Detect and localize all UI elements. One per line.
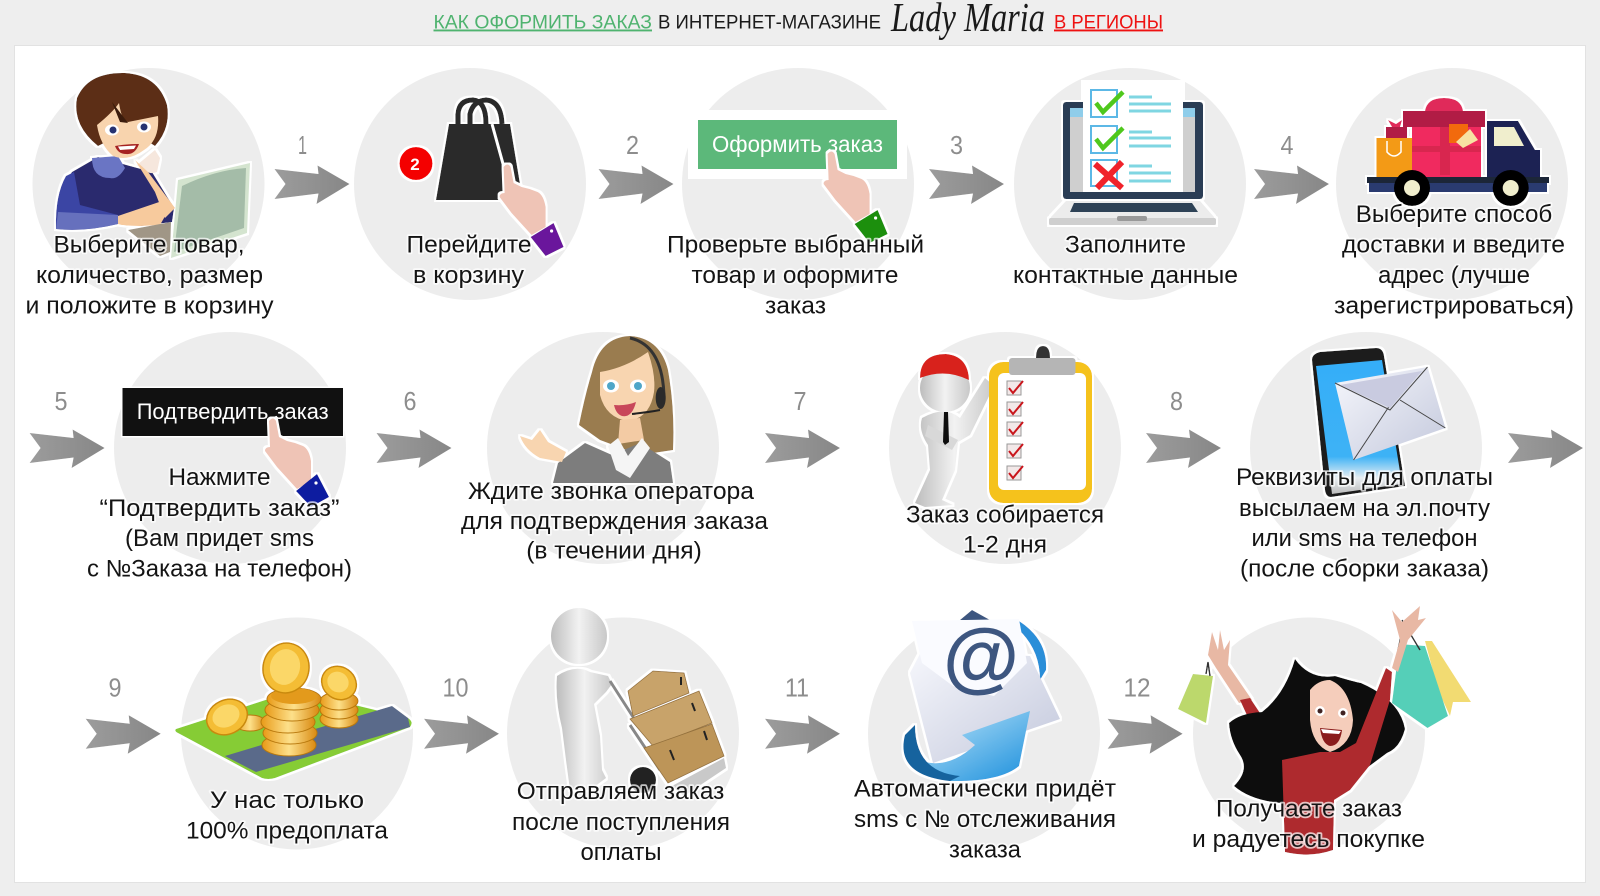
button: checkout: Оформить заказ	[712, 131, 883, 157]
number: 2	[626, 130, 639, 160]
number: 4	[1280, 130, 1294, 160]
text: Заказ собирается	[906, 502, 1104, 529]
icon: bank card with coins	[175, 639, 412, 779]
step: choose delivery	[1334, 68, 1574, 320]
text: или sms на телефон	[1252, 525, 1478, 552]
text: адрес (лучше	[1378, 262, 1530, 289]
text: Отправляем заказ	[517, 778, 724, 805]
text: товар и оформите	[692, 262, 898, 289]
step: choose product	[26, 68, 274, 320]
number: 5	[54, 386, 68, 416]
text: и радуетесь покупке	[1192, 826, 1425, 853]
number: 12	[1124, 673, 1150, 703]
circle	[1014, 68, 1246, 300]
arrow shape	[765, 715, 840, 754]
number: 9	[108, 673, 122, 703]
text: Заполните	[1065, 232, 1186, 259]
icon: shopping bag with badge: 2	[410, 155, 420, 174]
text: для подтверждения заказа	[461, 508, 769, 535]
arrow 12	[1108, 673, 1183, 754]
icon: happy woman with shopping bags	[1178, 606, 1471, 855]
arrow 10	[424, 673, 499, 754]
circle	[487, 332, 719, 564]
circle	[1336, 68, 1568, 300]
number: 1	[298, 130, 307, 160]
number: 8	[1170, 386, 1183, 416]
circle	[32, 68, 264, 300]
text: sms с № отслеживания	[854, 806, 1116, 833]
text: в корзину	[413, 262, 524, 289]
circle	[1193, 618, 1425, 850]
icon: woman at laptop	[56, 73, 250, 258]
step: check and checkout	[667, 68, 924, 320]
arrow shape	[86, 715, 161, 754]
text: Выберите товар,	[54, 232, 244, 259]
icon: delivery truck	[1367, 98, 1549, 206]
circle	[889, 332, 1121, 564]
arrow 9	[86, 673, 161, 754]
circle	[868, 618, 1100, 850]
text: доставки и введите	[1342, 232, 1565, 259]
arrow shape	[30, 430, 105, 468]
circle	[507, 618, 739, 850]
step: fill in contacts	[1013, 68, 1246, 300]
text: контактные данные	[1013, 262, 1238, 289]
number: 11	[785, 673, 809, 703]
arrow 7	[765, 386, 840, 468]
text: У нас только	[210, 787, 364, 814]
step: payment details	[1236, 332, 1493, 582]
arrow 1	[274, 130, 350, 204]
text: высылаем на эл.почту	[1239, 495, 1490, 522]
button: confirm	[121, 386, 344, 438]
text: “Подтвердить заказ”	[100, 495, 340, 522]
arrow 3	[929, 130, 1004, 204]
arrow shape	[376, 430, 452, 468]
icon: shopping bag with badge	[400, 100, 521, 200]
text	[26, 232, 274, 320]
text: зарегистрироваться)	[1334, 292, 1574, 320]
step: wait for operator call	[461, 332, 769, 564]
arrow shape	[1254, 166, 1329, 204]
number: 10	[442, 673, 468, 703]
arrow shape	[424, 715, 499, 754]
step: order assembly	[889, 332, 1121, 564]
circle	[1250, 332, 1482, 564]
text: Автоматически придёт	[854, 776, 1116, 803]
title	[434, 0, 1163, 40]
text	[87, 464, 352, 582]
text: оплаты	[580, 839, 662, 866]
circle	[181, 618, 413, 850]
arrow shape	[1146, 430, 1221, 468]
text: с №Заказа на телефон)	[87, 556, 352, 582]
text	[1192, 796, 1425, 853]
arrow 5	[30, 386, 105, 468]
text: Ждите звонка оператора	[468, 478, 755, 505]
arrow 4	[1254, 130, 1329, 204]
text: (после сборки заказа)	[1240, 556, 1489, 582]
text: (в течении дня)	[526, 538, 702, 564]
circle	[114, 332, 346, 564]
arrow 2	[598, 130, 674, 204]
text	[461, 478, 769, 564]
step: sms tracking	[854, 610, 1116, 864]
text	[1236, 464, 1493, 582]
button: confirm: Подтвердить заказ	[137, 399, 329, 424]
number: 7	[794, 386, 806, 416]
text: заказа	[949, 837, 1022, 864]
icon: email envelope with arrow: @	[943, 612, 1019, 700]
title link: to regions: В РЕГИОНЫ	[1054, 12, 1163, 34]
icon: figure with hand truck	[551, 608, 726, 796]
arrow: next row	[1508, 430, 1583, 468]
icon: laptop with checklist	[1049, 82, 1216, 225]
number: 6	[404, 386, 416, 416]
text: после поступления	[512, 809, 730, 836]
title text: online store: В ИНТЕРНЕТ-МАГАЗИНЕ	[658, 12, 881, 34]
step: receive order	[1178, 606, 1471, 855]
arrow 6	[376, 386, 452, 468]
step: shipping	[507, 608, 739, 866]
button: checkout	[688, 110, 907, 179]
text: Выберите способ	[1356, 201, 1552, 228]
text: количество, размер	[36, 262, 263, 289]
text: Нажмите	[168, 464, 270, 491]
circle	[682, 68, 914, 300]
text: заказ	[765, 292, 826, 320]
text: Реквизиты для оплаты	[1236, 464, 1493, 491]
text: Проверьте выбранный	[667, 232, 924, 259]
arrow shape	[765, 430, 840, 468]
text	[854, 776, 1116, 864]
icon: pointing hand, purple cuff	[500, 164, 564, 256]
title link: how to order: КАК ОФОРМИТЬ ЗАКАЗ	[434, 12, 652, 34]
icon: figure with clipboard	[915, 346, 1092, 507]
text: и положите в корзину	[26, 292, 274, 320]
arrow shape	[274, 166, 350, 204]
step: full prepayment	[175, 618, 413, 850]
arrow shape	[929, 166, 1004, 204]
icon: phone with envelope	[1312, 348, 1445, 497]
text	[667, 232, 924, 320]
text	[1013, 232, 1238, 289]
icon: email envelope with arrow	[903, 610, 1060, 781]
step: confirm order	[87, 332, 352, 582]
icon: pointing hand, green cuff	[824, 152, 888, 243]
text	[1334, 201, 1574, 320]
text: Получаете заказ	[1216, 796, 1402, 823]
text: Перейдите	[406, 232, 532, 259]
text	[512, 778, 730, 866]
text	[906, 502, 1104, 559]
text	[186, 787, 389, 845]
arrow 11	[765, 673, 840, 754]
arrow shape	[1108, 715, 1183, 754]
text	[406, 232, 532, 289]
number: 3	[950, 130, 963, 160]
text: 1-2 дня	[963, 532, 1047, 559]
icon: call-centre operator	[520, 336, 673, 483]
text: 100% предоплата	[186, 818, 389, 845]
circle	[354, 68, 586, 300]
arrow shape	[598, 166, 674, 204]
step: go to cart	[354, 68, 586, 300]
arrow 8	[1146, 386, 1221, 468]
text: (Вам придет sms	[125, 525, 314, 552]
icon: pointing hand, blue cuff	[265, 418, 329, 507]
